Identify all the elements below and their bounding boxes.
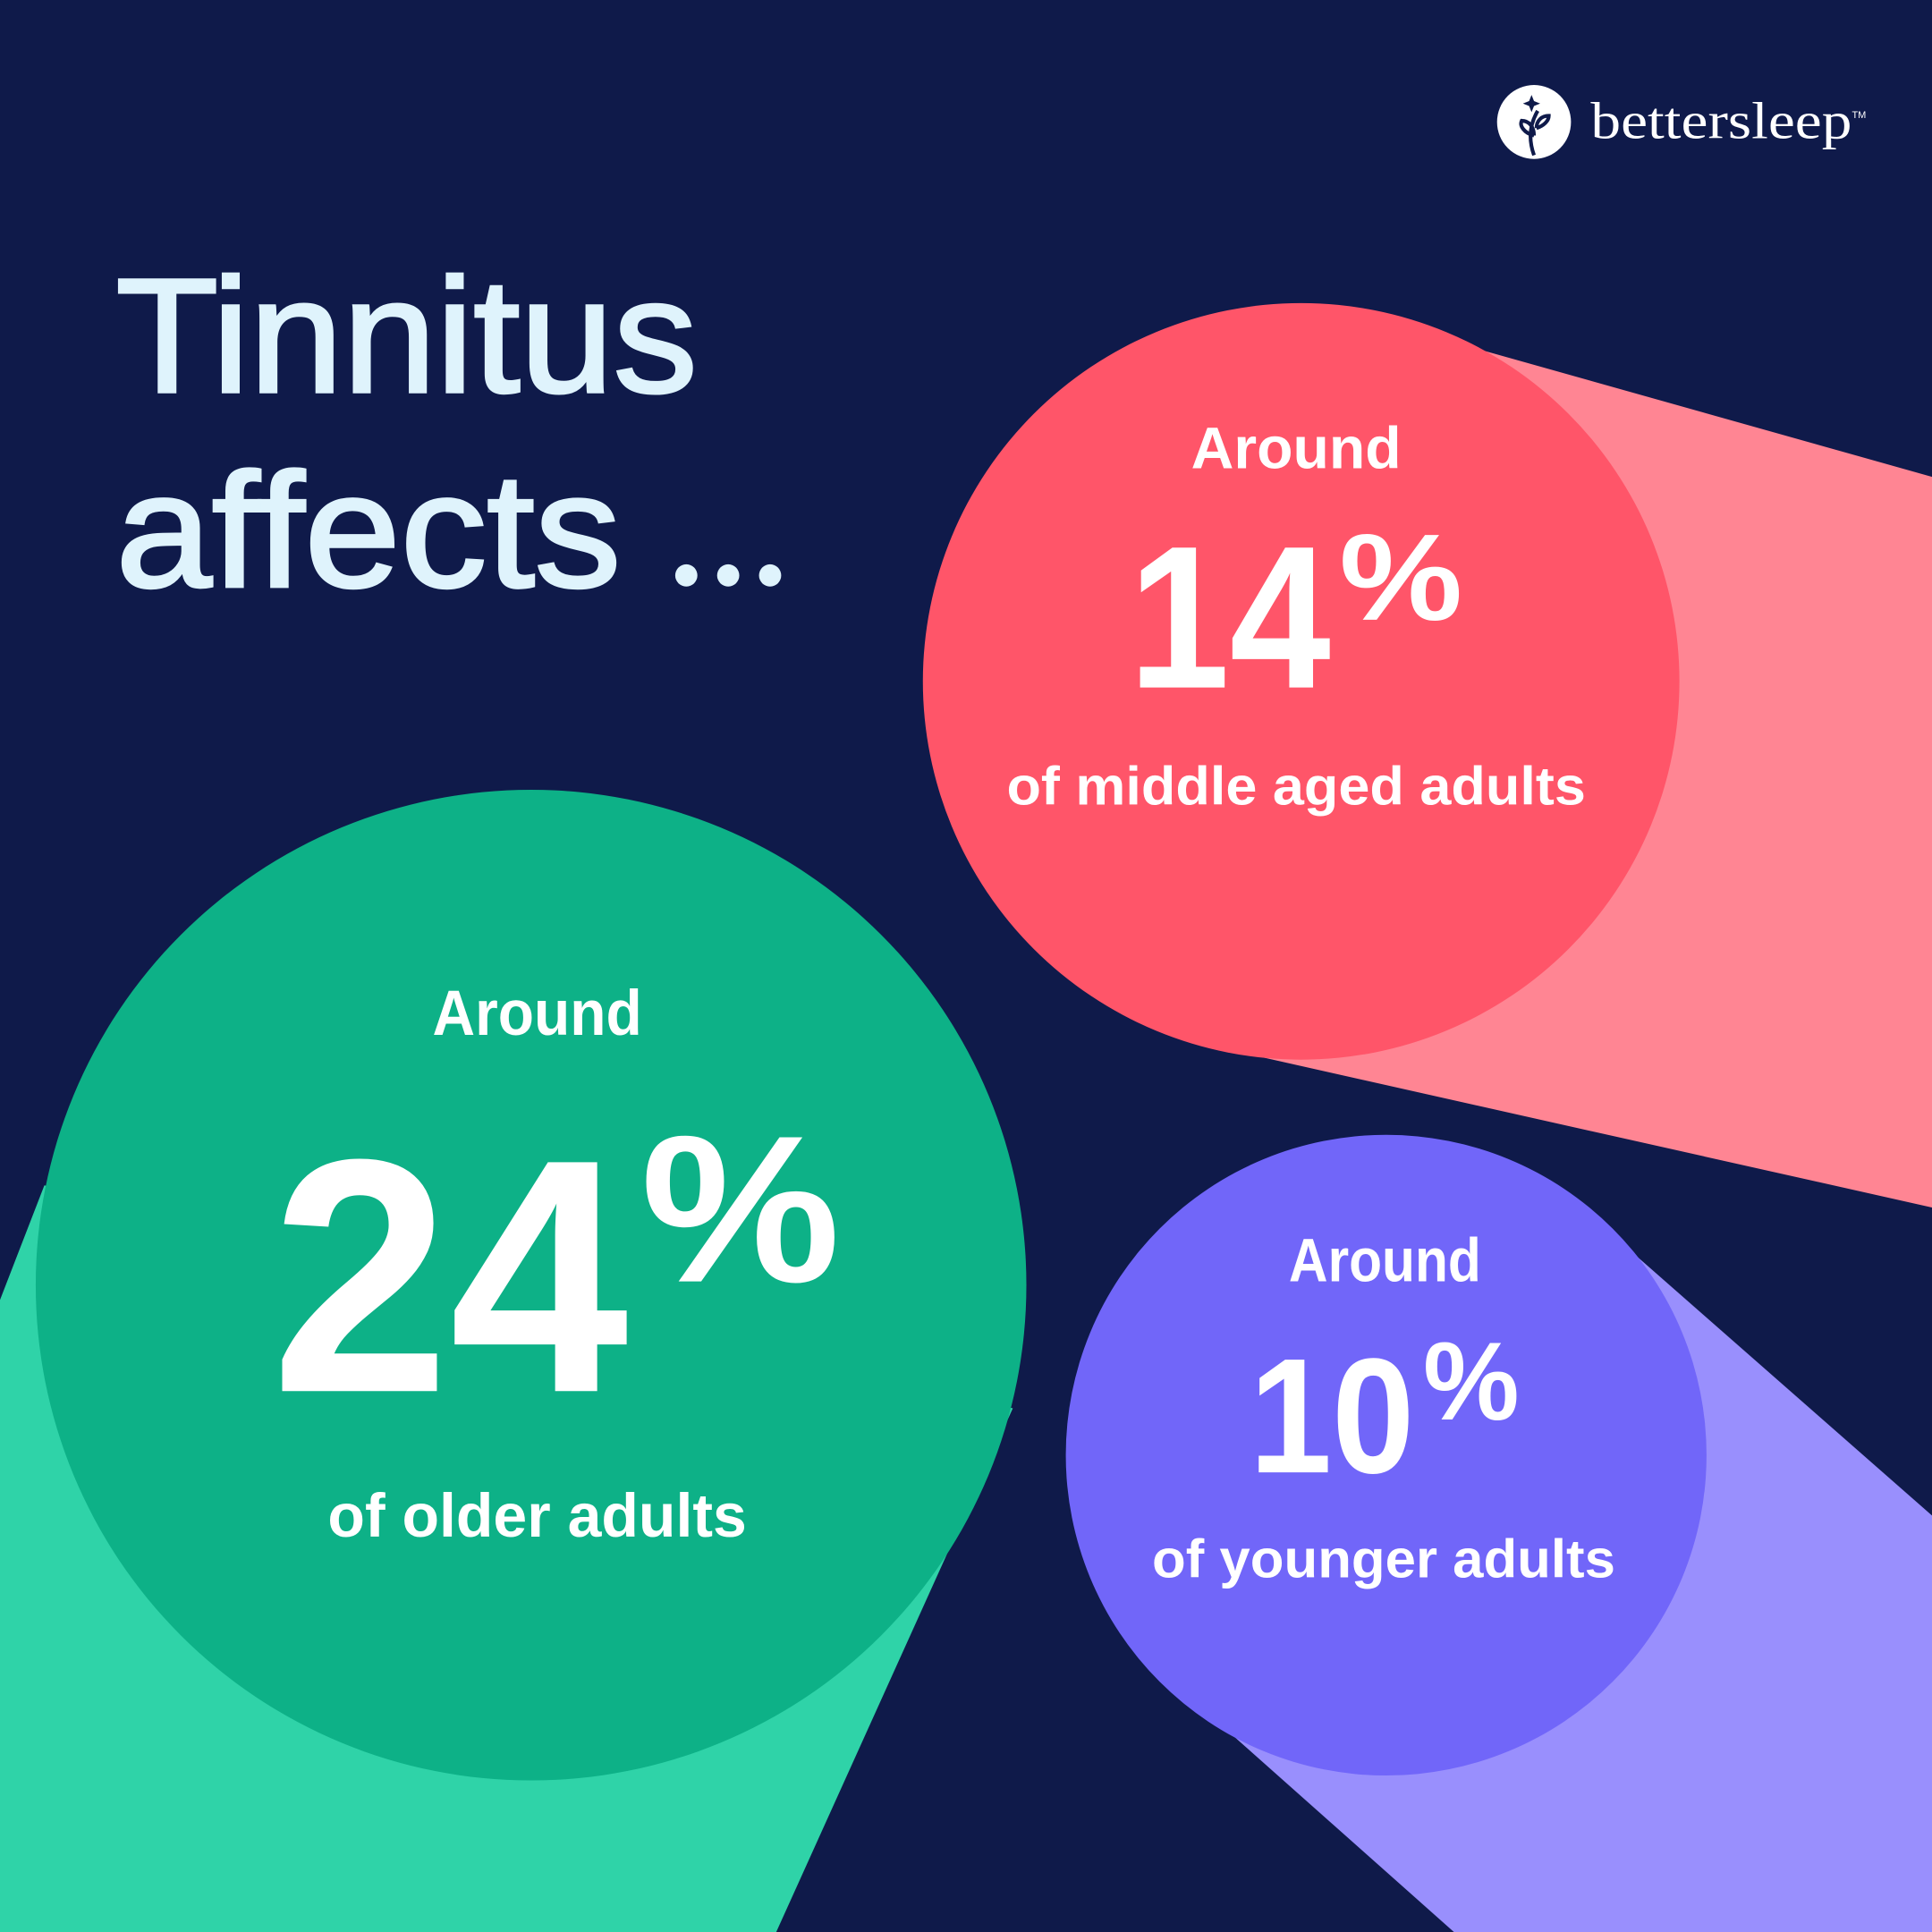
circle: younger: Around [1289,1226,1481,1295]
logo: TM [1852,110,1866,121]
beam: red [1250,347,1932,1208]
circle: middle aged: 14 [1129,504,1331,732]
logo: bettersleep [1590,91,1852,149]
circle: younger: % [1423,1320,1520,1444]
logo [1497,85,1866,159]
circle: younger: of younger adults [1152,1528,1615,1589]
beam: green [0,1185,1013,1932]
beam: purple [1233,1250,1932,1932]
circle: older: 24 [271,1089,631,1462]
circle: younger: 10 [1250,1324,1414,1507]
title: Tinnitus [115,244,698,427]
circle: older [36,790,1027,1781]
circle: middle aged: % [1339,509,1462,647]
circle: older: % [640,1092,840,1326]
circle: middle aged: Around [1191,415,1402,481]
circle: older: of older adults [327,1481,747,1550]
circle: younger [1066,1135,1707,1775]
circle: middle aged [923,303,1680,1060]
title [115,244,781,622]
circle: older: Around [433,978,642,1049]
title: affects [115,439,621,622]
circle: middle aged: of middle aged adults [1006,756,1586,817]
